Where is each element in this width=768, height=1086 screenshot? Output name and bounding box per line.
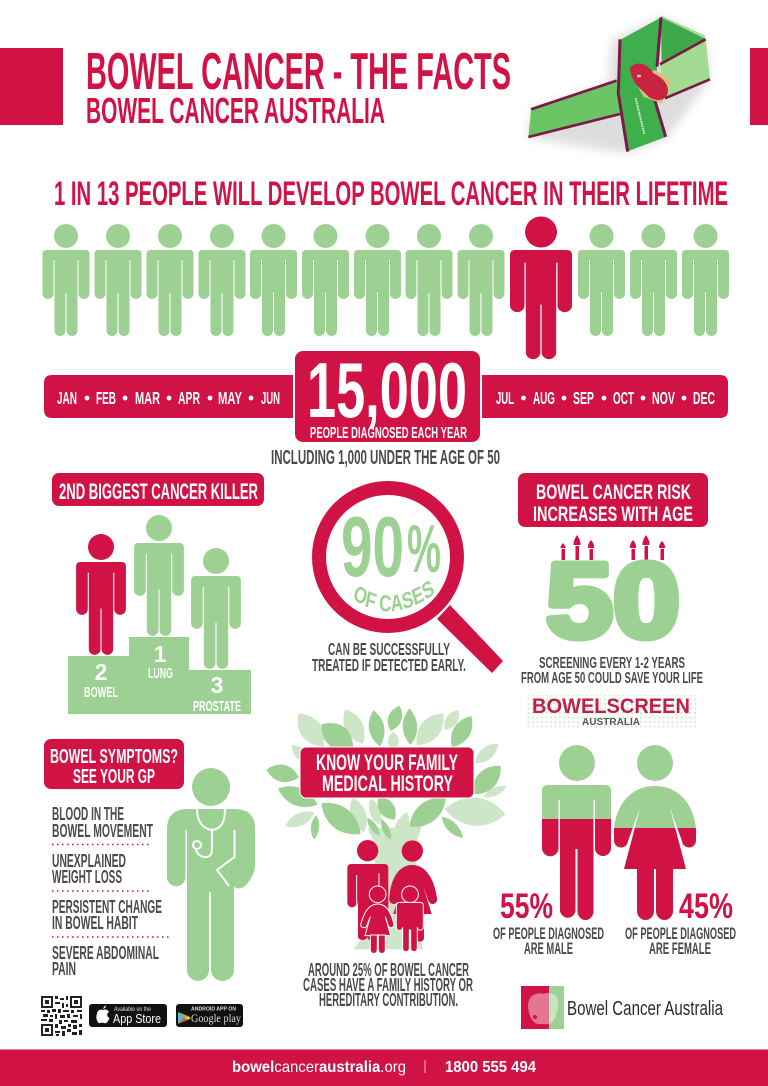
panel: 2nd biggest cancer killer (52, 473, 264, 715)
podium labels: PROSTATE (193, 699, 241, 715)
icon: doctor with stethoscope (167, 768, 255, 981)
callout: 15,000 people diagnosed (295, 346, 480, 442)
heading badge (300, 747, 474, 798)
podium (68, 637, 251, 714)
logo: Bowelscreen Australia: BOWELSCREEN (532, 695, 690, 718)
month band left: MAR (135, 388, 160, 408)
heading badge (52, 473, 264, 506)
heading badge: 2ND BIGGEST CANCER KILLER (59, 479, 258, 504)
stat: 45% female: ARE FEMALE (649, 940, 711, 958)
text: under 50: INCLUDING 1,000 UNDER THE AGE OF 50 (271, 446, 500, 469)
footer bar (0, 1050, 768, 1086)
month band left: JAN (57, 388, 77, 408)
text: family history (303, 960, 473, 1010)
badge: Google Play: ANDROID APP ON (191, 1006, 236, 1012)
panel: 90% of cases (312, 481, 503, 675)
curved label: of cases (354, 581, 434, 612)
icon: green awareness ribbon with apple pin (528, 17, 710, 153)
symptoms list: UNEXPLAINED (52, 851, 126, 871)
header accent block left (0, 48, 63, 125)
panel: risk increases with age (518, 473, 708, 728)
footer bar: 1800 555 494 (445, 1059, 536, 1076)
icon: magnifying glass (319, 488, 503, 673)
month band left: APR (178, 388, 200, 408)
icon: family (347, 840, 437, 953)
callout: 15,000 people diagnosed: PEOPLE DIAGNOSED EACH YEAR (310, 425, 467, 442)
month band right: OCT (613, 388, 634, 408)
heading badge: MEDICAL HISTORY (322, 771, 453, 796)
logo: Bowel Cancer Australia (521, 986, 724, 1029)
badge: Google Play (176, 1004, 243, 1027)
month band left (44, 375, 293, 418)
text: family history: CASES HAVE A FAMILY HISTORY OR (303, 975, 473, 995)
month band left: MAY (218, 388, 242, 408)
badge: Google Play: Google play (191, 1011, 241, 1025)
figure: prostate (191, 548, 241, 669)
symptoms list: BLOOD IN THE (52, 804, 124, 824)
heading badge: INCREASES WITH AGE (533, 502, 693, 526)
figure: bowel (76, 534, 126, 655)
month band right (482, 375, 728, 418)
badge: App Store (89, 1004, 167, 1027)
podium labels: BOWEL (84, 685, 118, 701)
symptoms list: BOWEL MOVEMENT (52, 821, 153, 841)
text: treated if detected early: TREATED IF DETECTED EARLY. (312, 655, 466, 675)
stat 90%: % (407, 511, 441, 587)
logo: Bowelscreen Australia: AUSTRALIA (582, 717, 640, 728)
heading badge: KNOW YOUR FAMILY (316, 750, 458, 775)
symptoms list (52, 804, 171, 979)
symptoms list: PAIN (52, 959, 76, 979)
panel: male / female split (493, 745, 736, 958)
stat: 45% female: 45% (679, 887, 733, 926)
month band right: AUG (533, 388, 555, 408)
podium labels: 1 (154, 641, 167, 667)
badge: App Store: Available on the (114, 1007, 152, 1013)
subtitle: BOWEL CANCER AUSTRALIA (86, 90, 385, 131)
callout: 15,000 people diagnosed: 15,000 (307, 346, 467, 434)
stat: 45% female (625, 887, 736, 958)
footer bar: bowelcanceraustralia.org (232, 1059, 406, 1076)
text: family history: AROUND 25% OF BOWEL CANCER (308, 960, 469, 980)
text: screening (521, 655, 703, 687)
text: treated if detected early (312, 639, 466, 675)
heading badge: BOWEL SYMPTOMS? (50, 745, 178, 768)
podium labels: LUNG (148, 666, 173, 682)
symptoms list: WEIGHT LOSS (52, 867, 122, 887)
figure: lung (134, 515, 184, 636)
heading badge (44, 739, 184, 789)
curved label: of cases: OF CASES (354, 581, 434, 612)
icon: male figure 55% (542, 745, 611, 920)
logo: Bowelscreen Australia (526, 695, 698, 728)
symptoms list: PERSISTENT CHANGE (52, 897, 162, 917)
symptoms list: SEVERE ABDOMINAL (52, 943, 159, 963)
icon: QR code (41, 996, 82, 1036)
panel: family medical history (265, 703, 508, 1010)
text: family history: HEREDITARY CONTRIBUTION. (319, 990, 458, 1010)
stat: 55% male (493, 887, 604, 958)
stat: 55% male: 55% (500, 887, 553, 926)
panel: bowel symptoms (44, 739, 255, 981)
symptoms list: IN BOWEL HABIT (52, 913, 138, 933)
stat 90%: 90 (341, 500, 404, 595)
month band left: JUN (261, 388, 280, 408)
stat: 55% male: OF PEOPLE DIAGNOSED (493, 925, 604, 943)
icon: birthday candles (560, 535, 665, 560)
icon: tree (265, 703, 508, 949)
month band right: NOV (652, 388, 675, 408)
heading badge: BOWEL CANCER RISK (536, 480, 691, 504)
logo: Bowel Cancer Australia: Bowel Cancer Australia (567, 998, 724, 1020)
badge: App Store: App Store (113, 1011, 161, 1026)
heading badge (518, 473, 708, 527)
heading badge: SEE YOUR GP (73, 765, 155, 788)
text: treated if detected early: CAN BE SUCCESSFULLY (328, 639, 450, 659)
icon: female figure 45% (614, 745, 696, 920)
month band right: DEC (693, 388, 715, 408)
month band left: FEB (96, 388, 116, 408)
podium labels: 3 (211, 672, 223, 698)
month band right: JUL (496, 388, 514, 408)
podium labels (84, 641, 241, 715)
stat: 55% male: ARE MALE (524, 940, 573, 958)
big number 50: 50 (546, 542, 680, 660)
month band right: SEP (573, 388, 594, 408)
podium labels: 2 (95, 659, 107, 685)
header accent block right (750, 48, 768, 125)
pictogram: 1 in 13 people row (42, 216, 729, 359)
